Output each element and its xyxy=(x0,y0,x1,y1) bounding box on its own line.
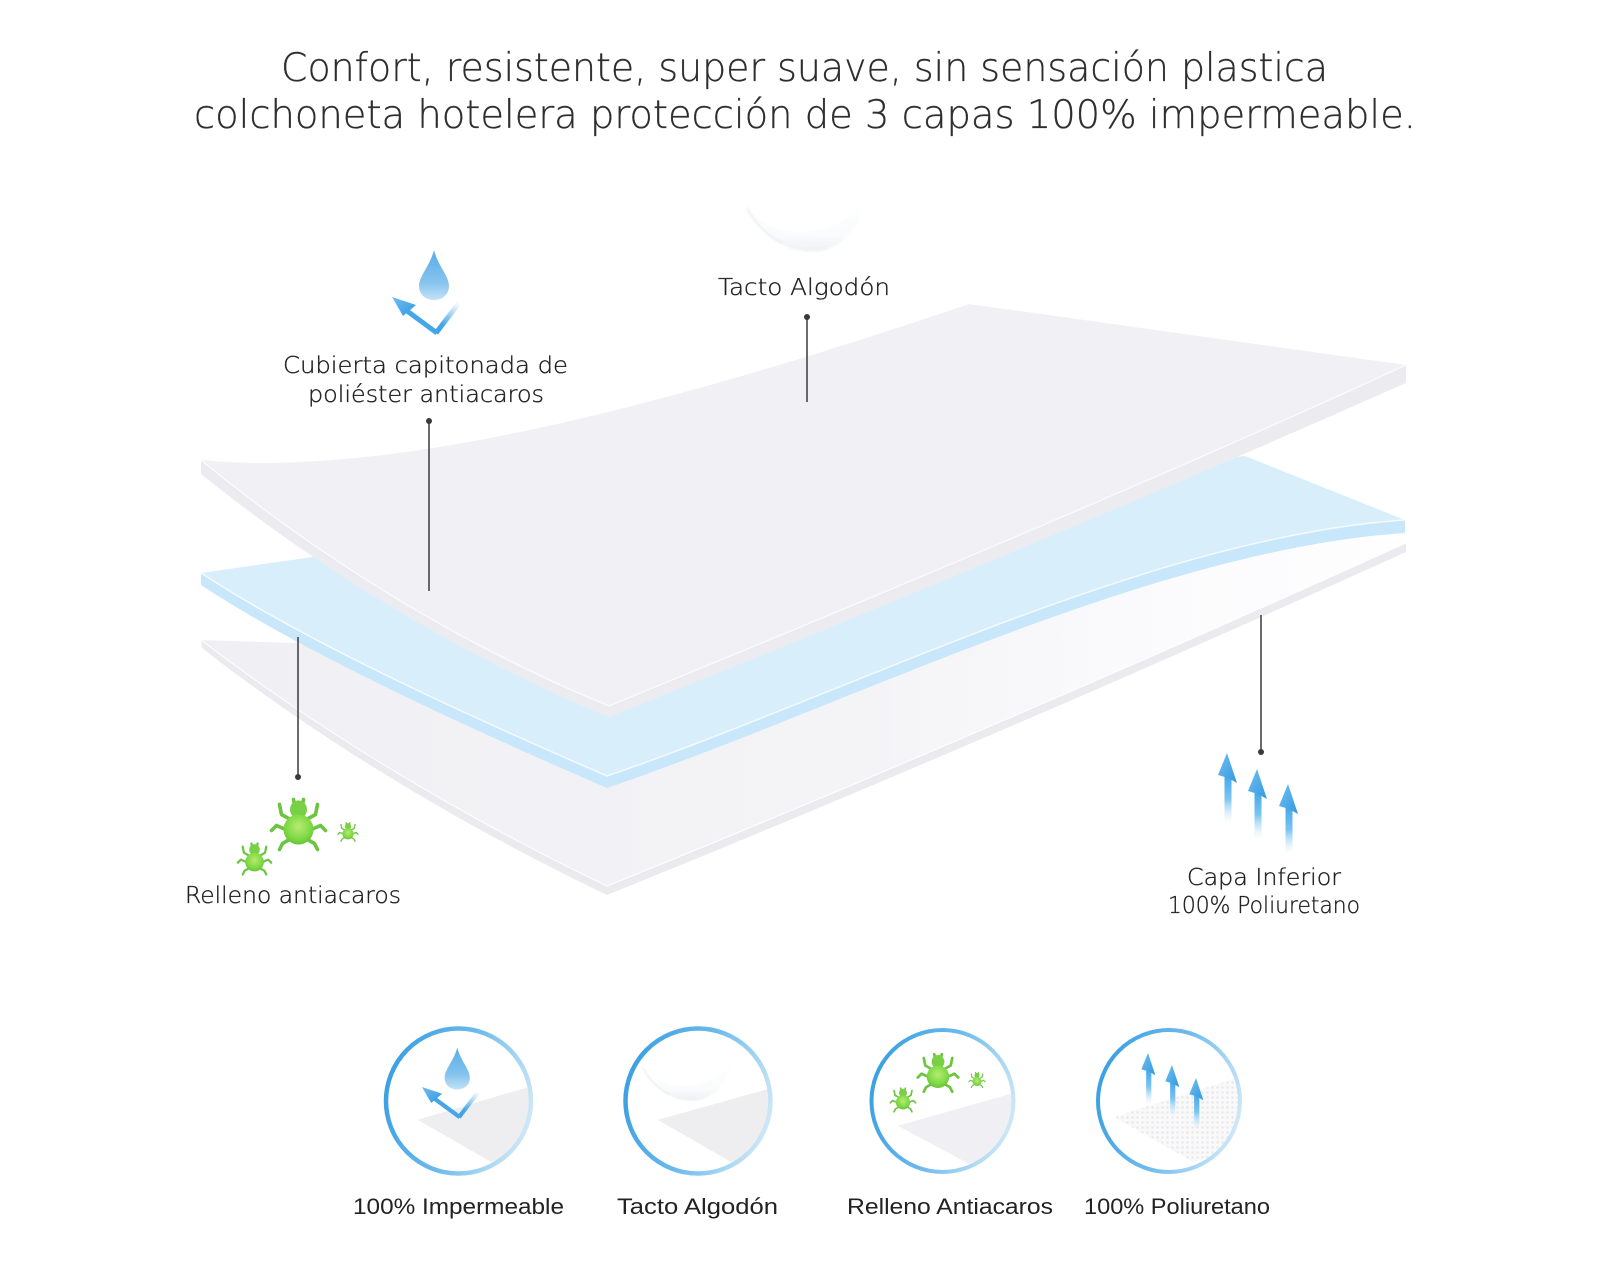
middle blue layer xyxy=(201,456,1405,788)
label: cover: poliéster antiacaros xyxy=(308,382,544,408)
icon: upward arrows xyxy=(1218,753,1298,854)
callout line: cover xyxy=(426,418,432,591)
bottom polyurethane layer xyxy=(201,500,1406,895)
badge: waterproof xyxy=(386,1028,532,1174)
icon: green mites xyxy=(238,800,358,874)
title: colchoneta hotelera protección de 3 capas 100% impermeable. xyxy=(194,93,1416,138)
badge: mite-proof filling xyxy=(872,1030,1014,1172)
label: cotton touch: Tacto Algodón xyxy=(718,275,890,301)
top quilted cover layer xyxy=(201,304,1406,717)
label: cover xyxy=(283,353,568,408)
title xyxy=(194,46,1416,138)
callout line: cotton touch xyxy=(804,314,810,402)
layered mattress protector diagram xyxy=(201,304,1406,895)
callout line: filling xyxy=(295,637,301,780)
badge label: waterproof: 100% Impermeable xyxy=(353,1194,564,1219)
label: filling: Relleno antiacaros xyxy=(185,883,401,909)
badge label: cotton touch: Tacto Algodón xyxy=(617,1194,778,1219)
callout line: bottom layer xyxy=(1258,615,1264,755)
icon: feather xyxy=(747,198,866,252)
badge label: polyurethane: 100% Poliuretano xyxy=(1084,1194,1270,1219)
label: bottom layer: Capa Inferior xyxy=(1187,865,1342,891)
title: Confort, resistente, super suave, sin sensación plastica xyxy=(281,46,1328,91)
badge label: mite-proof filling: Relleno Antiacaros xyxy=(847,1194,1053,1219)
badge: polyurethane xyxy=(1098,1030,1240,1172)
icon: water drop with check xyxy=(392,250,459,333)
label: bottom layer xyxy=(1168,865,1360,919)
badge: cotton touch xyxy=(626,1028,772,1174)
label: bottom layer: 100% Poliuretano xyxy=(1168,893,1360,919)
label: cover: Cubierta capitonada de xyxy=(283,353,568,379)
